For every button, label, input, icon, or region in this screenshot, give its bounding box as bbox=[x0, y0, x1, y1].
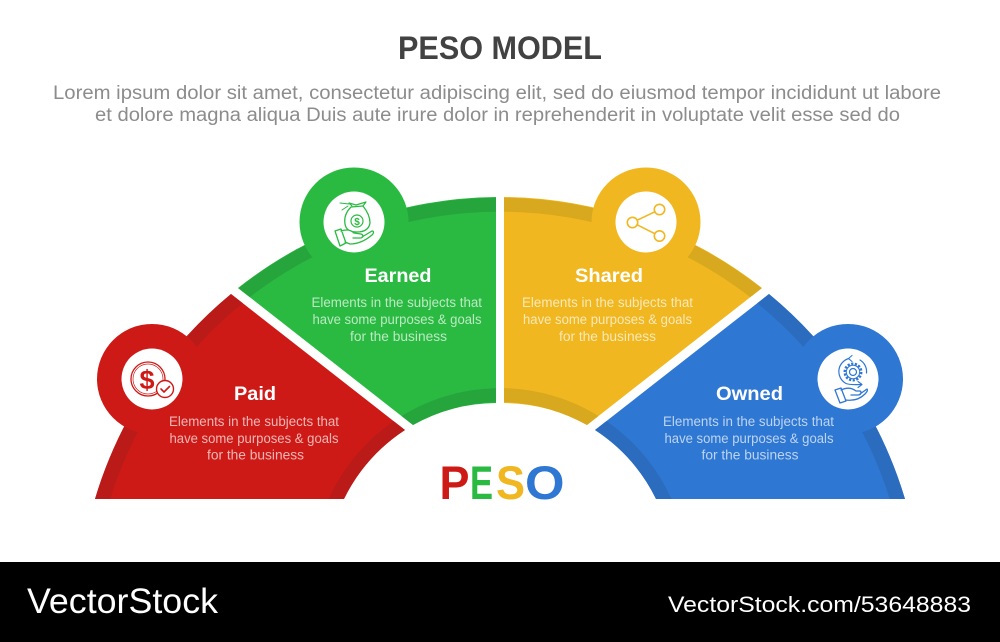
footer bar bbox=[0, 562, 1000, 642]
label: owned: Owned bbox=[716, 384, 783, 405]
description: paid: Elements in the subjects that bbox=[169, 414, 339, 429]
icon: money bag on hand: $ bbox=[354, 217, 360, 228]
center PESO wordmark: S bbox=[496, 456, 525, 509]
center PESO wordmark: E bbox=[470, 456, 493, 509]
panel: shared bbox=[504, 168, 762, 425]
description: paid bbox=[169, 414, 339, 462]
description: earned: Elements in the subjects that bbox=[312, 295, 482, 310]
description: shared: have some purposes & goals bbox=[523, 312, 692, 327]
description: earned: have some purposes & goals bbox=[312, 312, 482, 327]
icon: dollar coin with check: $ bbox=[139, 365, 155, 395]
footer image url: VectorStock.com/53648883 bbox=[668, 592, 971, 617]
center PESO wordmark bbox=[440, 456, 564, 509]
panel: earned bbox=[238, 168, 496, 425]
center PESO wordmark: O bbox=[525, 456, 564, 509]
footer logo: VectorStock bbox=[27, 582, 219, 621]
description: shared: Elements in the subjects that bbox=[522, 295, 693, 310]
icon: money bag on hand bbox=[335, 202, 374, 246]
subtitle text bbox=[53, 83, 941, 126]
subtitle text: Lorem ipsum dolor sit amet, consectetur adipiscing elit, sed do eiusmod tempor incididunt ut labore bbox=[53, 83, 941, 104]
description: paid: have some purposes & goals bbox=[170, 431, 339, 446]
description: owned: Elements in the subjects that bbox=[663, 414, 834, 429]
center PESO wordmark: P bbox=[440, 456, 470, 509]
subtitle text: et dolore magna aliqua Duis aute irure dolor in reprehenderit in voluptate velit esse sed do bbox=[95, 105, 900, 126]
description: paid: for the business bbox=[207, 448, 304, 462]
icon: gear cycle on hand bbox=[835, 356, 867, 403]
description: owned: for the business bbox=[702, 448, 799, 462]
label: earned: Earned bbox=[364, 266, 432, 287]
icon: share nodes bbox=[627, 204, 665, 241]
label: shared: Shared bbox=[575, 266, 643, 287]
description: earned bbox=[312, 295, 482, 344]
label: paid: Paid bbox=[234, 384, 276, 405]
description: earned: for the business bbox=[350, 329, 447, 344]
description: owned bbox=[663, 414, 834, 462]
title: PESO MODEL bbox=[398, 30, 602, 66]
description: shared bbox=[522, 295, 693, 344]
description: shared: for the business bbox=[559, 329, 656, 344]
panel: paid bbox=[95, 294, 405, 499]
description: owned: have some purposes & goals bbox=[664, 431, 834, 446]
icon: dollar coin with check bbox=[131, 362, 174, 398]
panel: owned bbox=[595, 294, 905, 499]
